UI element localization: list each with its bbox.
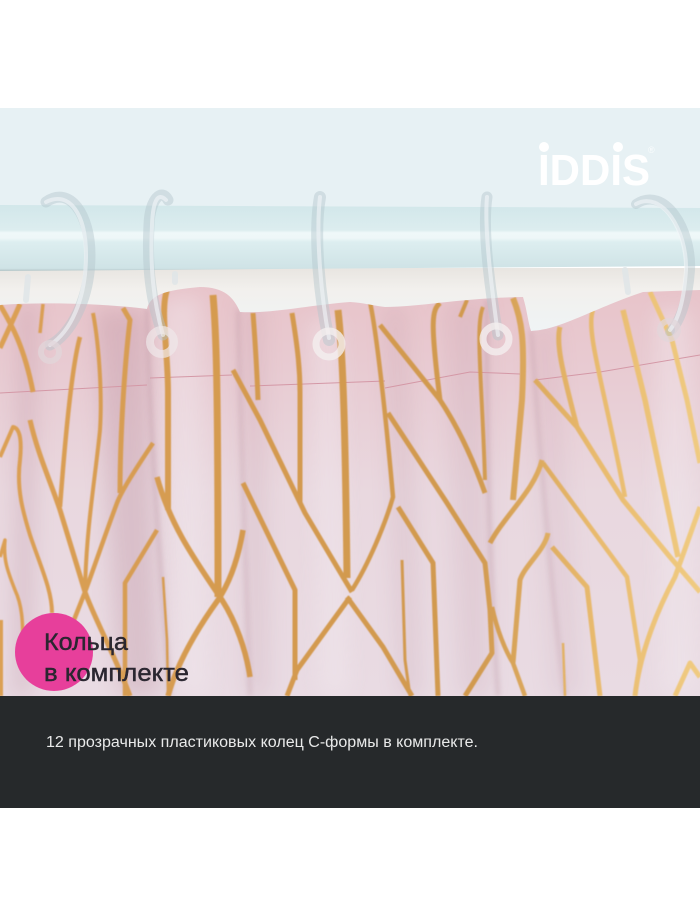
badge heading: Кольца [44, 629, 128, 656]
wall background [0, 108, 700, 208]
badge: pink circle [15, 613, 93, 691]
icon: plastic C-ring 5 [636, 200, 690, 339]
dark caption band [0, 696, 700, 808]
icon: plastic C-ring 2 [148, 195, 174, 354]
photo: shower curtain on rod [0, 108, 700, 696]
area below the rod [0, 268, 700, 338]
caption text: 12 прозрачных пластиковых колец С-формы в комплекте. [46, 734, 478, 751]
hem stitching [0, 355, 700, 393]
icon: plastic C-ring 1 [41, 197, 90, 361]
logo: IDDIS: ® [648, 145, 655, 155]
icon: plastic C-ring 3 [316, 197, 342, 357]
logo: IDDIS: IDDIS [538, 146, 650, 195]
curtain fabric with gold pattern [0, 285, 700, 696]
gold geometric lines [0, 290, 700, 696]
curtain rod [0, 205, 700, 271]
icon: plastic C-ring 4 [483, 197, 509, 352]
small ring ends behind rod [26, 270, 628, 300]
badge heading: в комплекте [44, 660, 189, 687]
badge heading [44, 629, 189, 687]
sharp fold edges [147, 300, 565, 696]
